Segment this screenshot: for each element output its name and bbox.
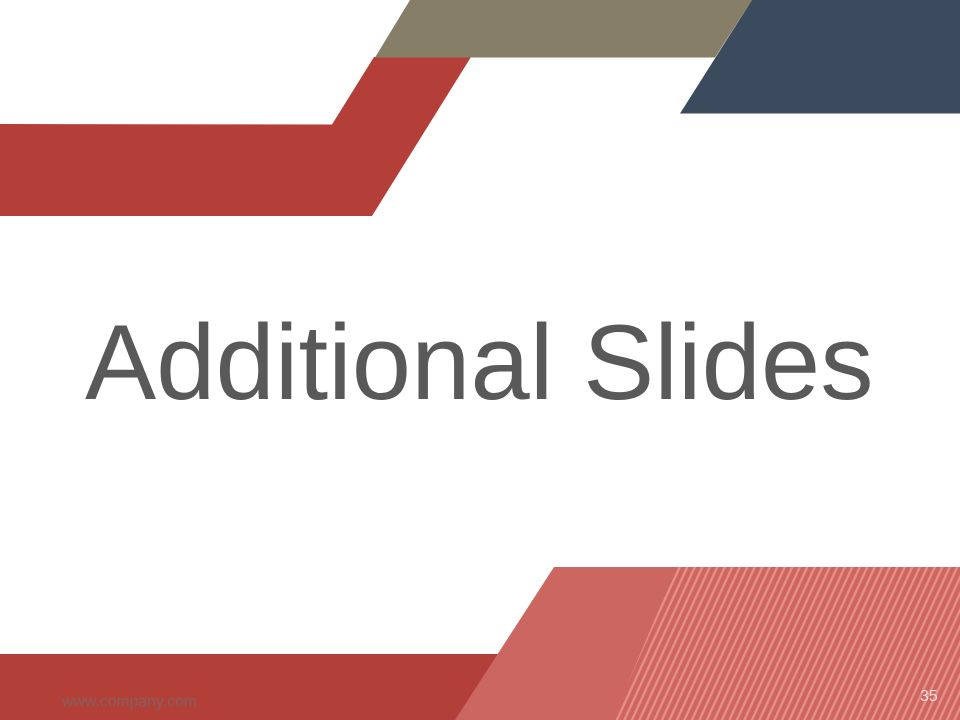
bottom banner: striped texture (612, 567, 960, 720)
title: Additional Slides (85, 302, 874, 422)
page number: 35 (920, 688, 938, 705)
bottom banner: dark red bar (0, 654, 500, 720)
top banner: red stepped shape (0, 57, 471, 216)
footer website: www.company.com (61, 694, 197, 710)
top banner: navy shape (680, 0, 960, 114)
bottom banner: light red panel (455, 567, 960, 720)
top banner: olive parallelogram (375, 0, 752, 58)
